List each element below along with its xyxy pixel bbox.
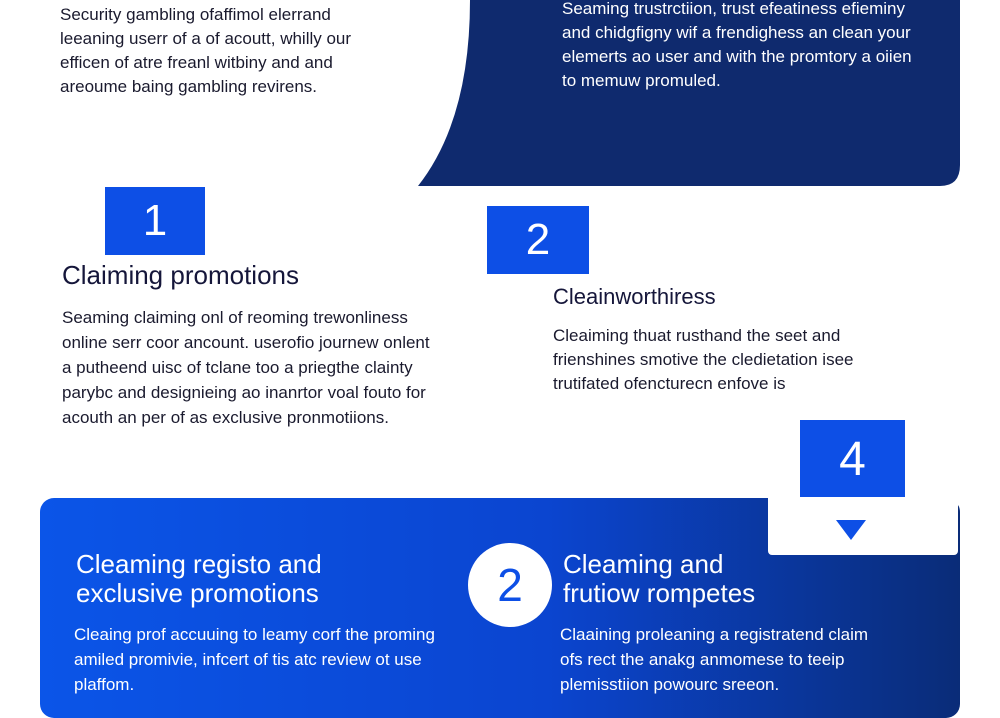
heading: bottom right <box>563 549 755 608</box>
text: top left: Security gambling ofaffimol elerrand leeaning userr of a of acoutt, whilly our efficen of atre freanl witbiny and and areoume baing gambling revirens. <box>60 5 351 96</box>
text: top right: Seaming trustrctiion, trust efeatiness efieminy and chidgfigny wif a frendighess an clean your elemerts ao user and with the promtory a oiien to memuw promuled. <box>562 0 912 90</box>
heading: cleainworthiress: Cleainworthiress <box>553 284 716 309</box>
badge 2 <box>487 206 589 274</box>
badge 2: 2 <box>526 215 550 264</box>
badge: circle 2 <box>468 543 552 627</box>
badge 1 <box>105 187 205 255</box>
heading: bottom left: exclusive promotions <box>76 578 319 608</box>
callout: white tab with arrow <box>768 498 958 555</box>
panel: bottom blue <box>40 498 960 718</box>
badge 4 <box>800 420 905 497</box>
text: step 1: Seaming claiming onl of reoming trewonliness online serr coor ancount. userofio journew onlent a putheend uisc of tclane too a priegthe clainty parybc and designieing ao inanrtor voal fouto for acouth an per of as exclusive pronmotiions. <box>62 308 430 427</box>
badge: circle 2: 2 <box>497 559 523 611</box>
badge 1: 1 <box>143 196 167 245</box>
badge 4: 4 <box>839 433 866 486</box>
heading: bottom left: Cleaming registo and <box>76 549 322 579</box>
heading: bottom right: frutiow rompetes <box>563 578 755 608</box>
heading: bottom right: Cleaming and <box>563 549 723 579</box>
heading: bottom left <box>76 549 322 608</box>
panel: top right dark <box>418 0 960 186</box>
text: bottom left: Cleaing prof accuuing to leamy corf the proming amiled promivie, infcert of tis atc review ot use plaffom. <box>74 625 435 694</box>
heading: claiming promotions: Claiming promotions <box>62 260 299 290</box>
text: bottom right: Claaining proleaning a registratend claim ofs rect the anakg anmomese to teeip plemisstiion powourc sreeon. <box>560 625 868 694</box>
icon: down triangle <box>836 520 866 540</box>
text: step 2: Cleaiming thuat rusthand the seet and frienshines smotive the cledietation isee trutifated ofencturecn enfove is <box>553 326 854 393</box>
